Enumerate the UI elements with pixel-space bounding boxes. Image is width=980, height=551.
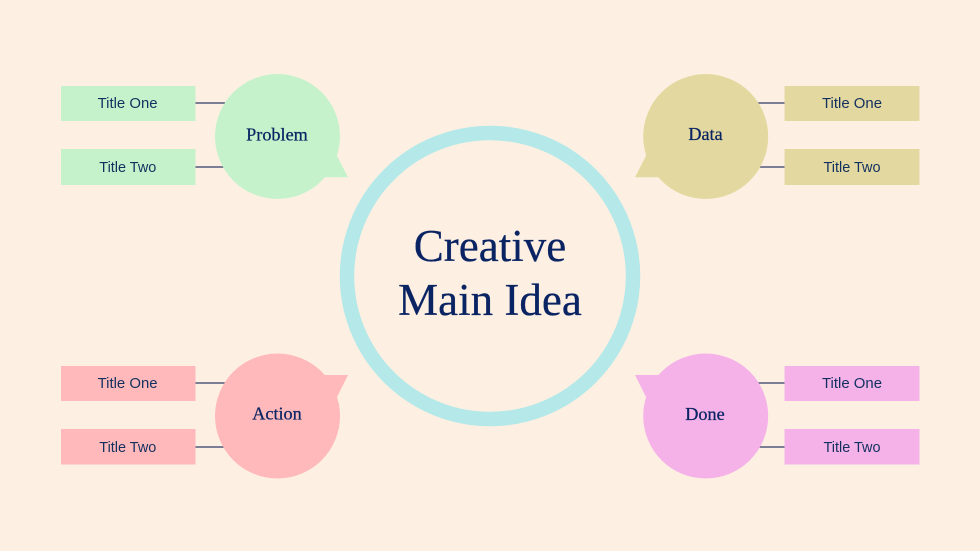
- panel: action: Action: [252, 404, 302, 424]
- panel: done: Done: [685, 404, 725, 424]
- panel: done: Title Two: [824, 439, 880, 456]
- panel: problem: Problem: [246, 124, 308, 144]
- panel: problem: Title Two: [99, 159, 156, 176]
- panel: action: Title Two: [99, 439, 156, 456]
- panel: action: [61, 354, 348, 478]
- panel: problem: Title One: [98, 95, 158, 112]
- central ring with main idea: [347, 133, 633, 419]
- panel: done: Title One: [822, 375, 882, 392]
- panel: done: [635, 354, 920, 478]
- panel: action: Title One: [98, 375, 158, 392]
- title: [398, 221, 582, 325]
- title: Main Idea: [398, 275, 582, 325]
- panel: data: [635, 74, 920, 199]
- panel: data: Title One: [822, 95, 882, 112]
- panel: problem: [61, 74, 348, 199]
- title: Creative: [414, 221, 566, 271]
- panel: data: Title Two: [824, 159, 880, 176]
- panel: data: Data: [688, 124, 723, 144]
